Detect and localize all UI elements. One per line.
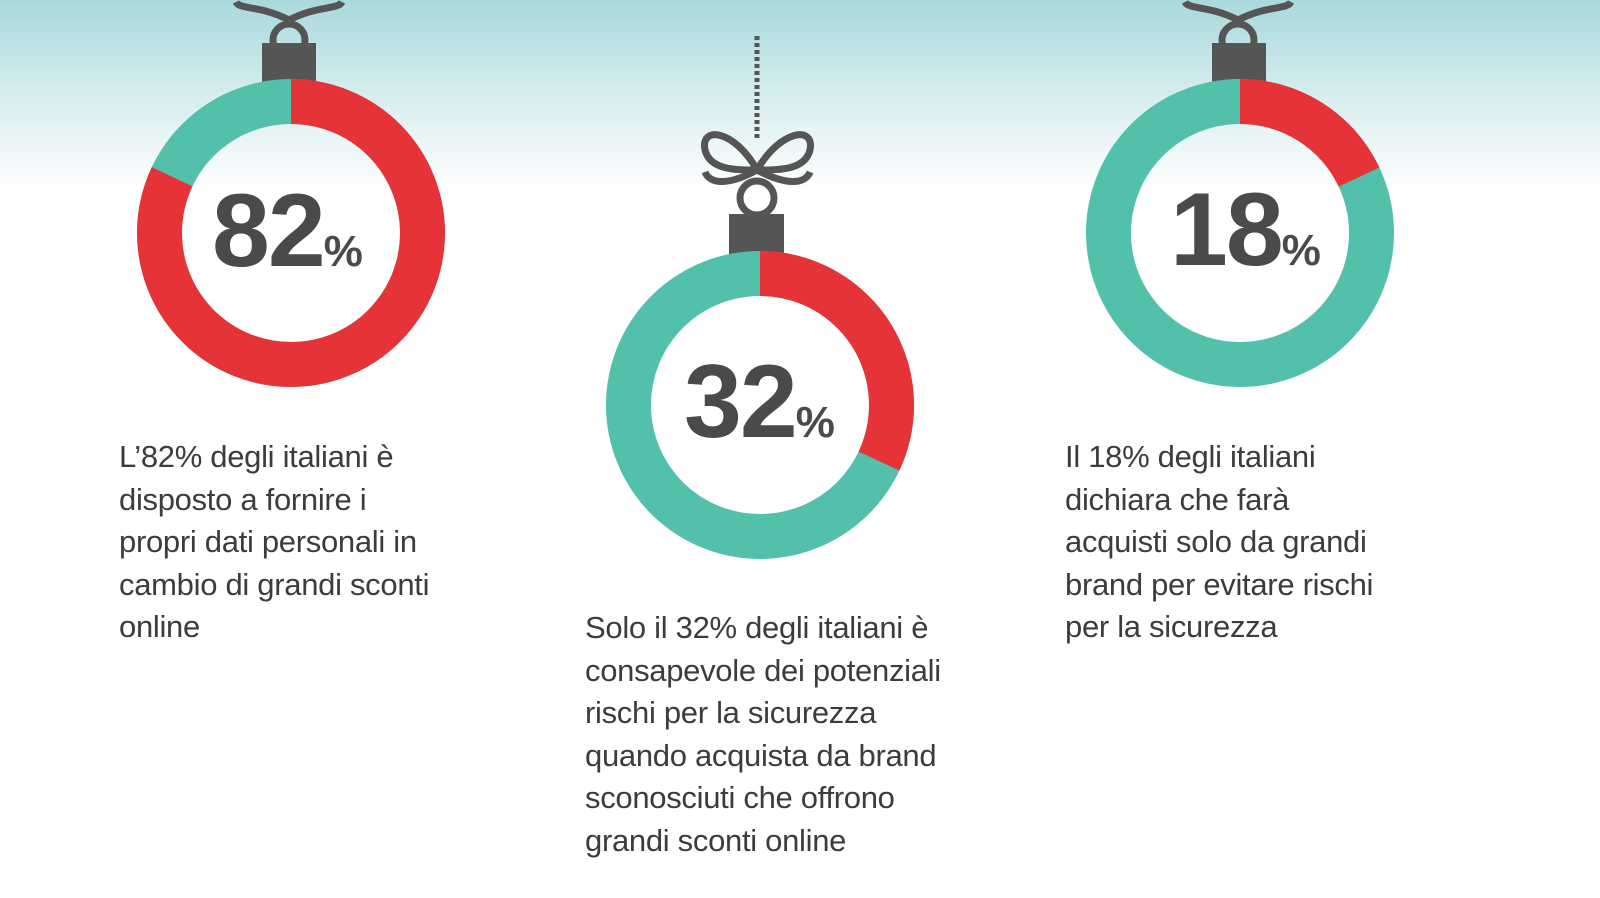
topper middle with chain [705, 36, 810, 254]
value 82%: 82% [212, 173, 362, 289]
text: 32% description: quando acquista da brand [585, 738, 936, 772]
text: 82% description: L’82% degli italiani è [119, 439, 393, 474]
ornament: 32% [628, 36, 892, 536]
text: 18% description: dichiara che farà [1065, 482, 1289, 516]
text: 18% description [1065, 439, 1373, 644]
value 18%: 18% [1170, 172, 1320, 288]
text: 32% description: rischi per la sicurezza [585, 695, 876, 730]
text: 18% description: per la sicurezza [1065, 609, 1277, 644]
value 32%: 32% [684, 344, 834, 460]
text: 32% description: grandi sconti online [585, 822, 846, 858]
text: 18% description: brand per evitare rischi [1065, 566, 1373, 602]
topper left [236, 2, 342, 56]
text: 18% description: acquisti solo da grandi [1065, 524, 1367, 559]
ornament: 82% [160, 2, 422, 364]
ornament: 18% [1108, 2, 1372, 364]
text: 82% description: cambio di grandi sconti [119, 566, 429, 602]
text: 32% description [585, 610, 941, 858]
text: 32% description: Solo il 32% degli italiani è [585, 610, 928, 645]
text: 82% description: propri dati personali in [119, 524, 417, 559]
topper right [1185, 2, 1291, 56]
text: 32% description: sconosciuti che offrono [585, 780, 895, 815]
text: 32% description: consapevole dei potenziali [585, 652, 941, 688]
text: 82% description: disposto a fornire i [119, 482, 366, 516]
text: 82% description [119, 439, 429, 644]
text: 82% description: online [119, 609, 200, 644]
text: 18% description: Il 18% degli italiani [1065, 439, 1315, 474]
